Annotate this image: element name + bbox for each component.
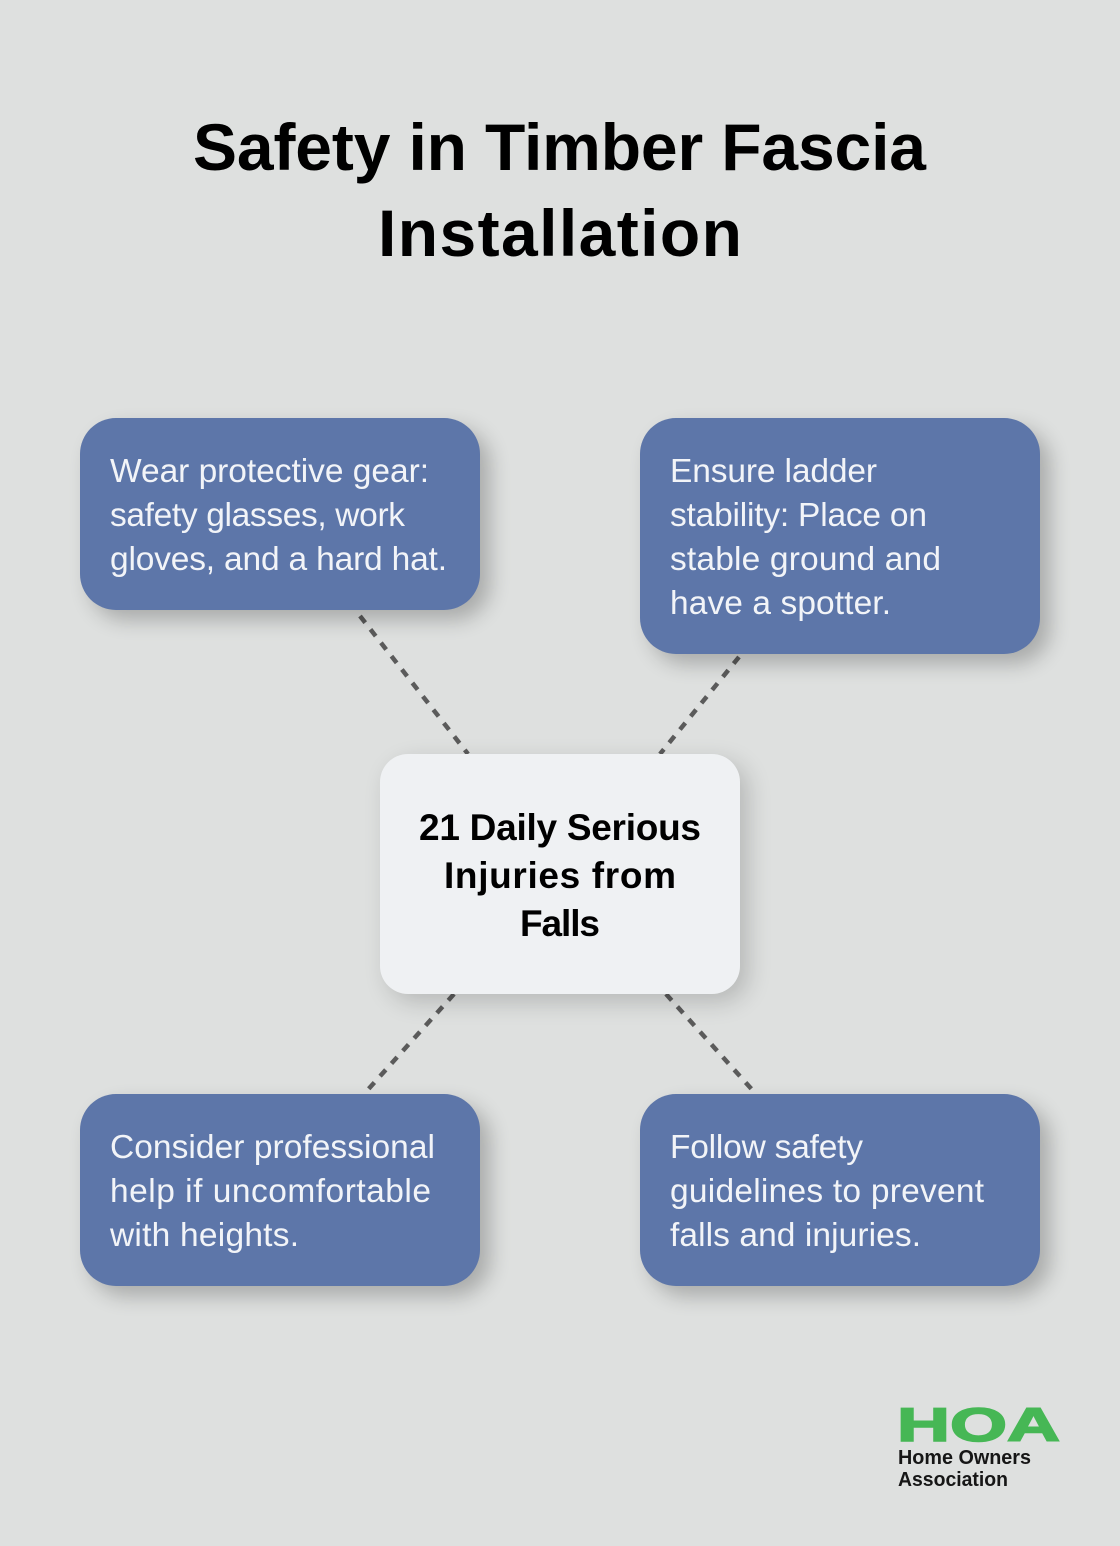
text: protective gear: Wear protective gear: bbox=[110, 453, 429, 490]
panel: safety guidelines card bbox=[640, 1094, 1040, 1286]
title: Safety in Timber Fascia bbox=[193, 110, 927, 184]
text: safety guidelines bbox=[670, 1129, 985, 1254]
logo: HOA Home Owners Association: HOA bbox=[897, 1398, 1060, 1451]
text: safety guidelines: Follow safety bbox=[670, 1129, 863, 1166]
text: ladder stability: have a spotter. bbox=[670, 585, 891, 622]
logo: HOA Home Owners Association bbox=[897, 1398, 1060, 1491]
text: professional help: help if uncomfortable bbox=[110, 1173, 431, 1210]
text: ladder stability: Ensure ladder bbox=[670, 453, 877, 490]
text: protective gear: safety glasses, work bbox=[110, 497, 405, 534]
text: central statistic bbox=[419, 807, 701, 944]
text: safety guidelines: falls and injuries. bbox=[670, 1217, 921, 1254]
text: ladder stability: stability: Place on bbox=[670, 497, 927, 534]
text: professional help bbox=[109, 1129, 435, 1254]
text: central statistic: Injuries from bbox=[444, 855, 676, 896]
text: protective gear: gloves, and a hard hat. bbox=[110, 541, 447, 578]
panel: ladder stability card bbox=[640, 418, 1040, 654]
logo: HOA Home Owners Association: Association bbox=[898, 1469, 1008, 1491]
text: professional help: with heights. bbox=[109, 1217, 299, 1254]
panel: professional help card bbox=[80, 1094, 480, 1286]
text: ladder stability: stable ground and bbox=[670, 541, 941, 578]
title: Installation bbox=[378, 196, 742, 270]
text: safety guidelines: guidelines to prevent bbox=[670, 1173, 985, 1210]
text: professional help: Consider professional bbox=[110, 1129, 435, 1166]
panel: protective gear card bbox=[80, 418, 480, 610]
text: protective gear bbox=[110, 453, 447, 578]
logo: HOA Home Owners Association: Home Owners bbox=[898, 1447, 1031, 1469]
text: central statistic: 21 Daily Serious bbox=[419, 807, 701, 848]
text: ladder stability bbox=[670, 453, 941, 622]
title bbox=[193, 110, 927, 270]
panel: central statistic card bbox=[380, 754, 740, 994]
text: central statistic: Falls bbox=[520, 903, 600, 944]
